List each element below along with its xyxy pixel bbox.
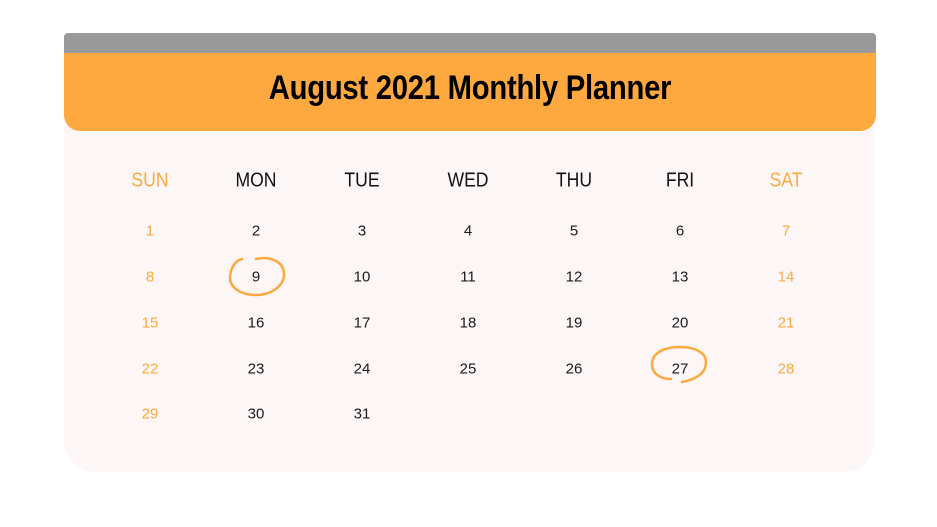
calendar grid: 24 — [354, 360, 370, 378]
calendar grid: 21 — [778, 314, 794, 332]
header: title band — [64, 53, 876, 131]
calendar grid: 26 — [566, 360, 582, 378]
top gray bar — [64, 33, 876, 55]
calendar grid: SAT — [770, 170, 802, 192]
calendar grid: TUE — [344, 170, 380, 192]
calendar grid: 13 — [672, 268, 688, 286]
calendar grid: 14 — [778, 268, 794, 286]
calendar grid: 4 — [464, 222, 472, 240]
icon: circle around 9 — [228, 256, 286, 296]
calendar grid: FRI — [666, 170, 694, 192]
card background — [64, 33, 874, 472]
calendar grid: SUN — [131, 170, 169, 192]
calendar grid: 18 — [460, 314, 476, 332]
calendar grid: 19 — [566, 314, 582, 332]
calendar grid: 11 — [460, 268, 476, 286]
calendar grid: 9 — [252, 268, 260, 286]
calendar grid: 12 — [566, 268, 582, 286]
header: title band: August 2021 Monthly Planner — [269, 69, 671, 107]
calendar grid: 6 — [676, 222, 684, 240]
calendar grid: 20 — [672, 314, 688, 332]
calendar grid: 29 — [142, 406, 158, 422]
calendar grid: WED — [447, 170, 489, 192]
calendar grid: 15 — [142, 314, 158, 332]
calendar grid: 2 — [252, 222, 260, 240]
calendar grid: 22 — [142, 360, 158, 378]
icon: circle around 27 — [650, 346, 708, 384]
calendar grid: 3 — [358, 222, 366, 240]
calendar grid: 30 — [248, 406, 264, 422]
calendar grid: 7 — [782, 222, 790, 240]
calendar grid: 28 — [778, 360, 794, 378]
calendar grid: 31 — [354, 406, 370, 422]
calendar grid: THU — [556, 170, 592, 192]
calendar grid: 17 — [354, 314, 370, 332]
calendar grid: 23 — [248, 360, 264, 378]
calendar grid: 27 — [672, 360, 688, 378]
calendar grid: MON — [235, 170, 277, 192]
calendar grid: 8 — [146, 268, 154, 286]
calendar grid: 16 — [248, 314, 264, 332]
calendar grid: 10 — [354, 268, 370, 286]
calendar grid: 5 — [570, 222, 578, 240]
calendar grid: 25 — [460, 360, 476, 378]
calendar grid: 1 — [146, 222, 154, 240]
